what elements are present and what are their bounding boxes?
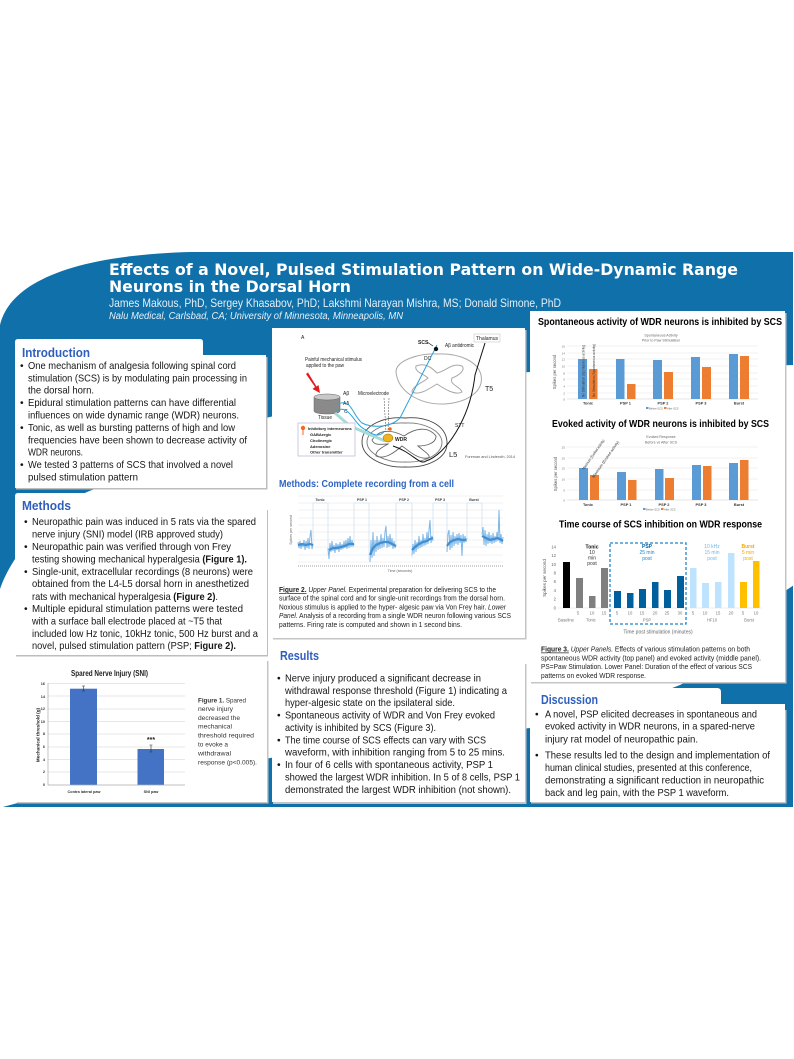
legend: inhibitory interneurons: Adenosine [310,444,331,449]
diagram: experimental preparation: DC [424,356,432,362]
bar chart: time course: 10 [754,610,759,616]
bar chart: evoked activity: Before vs After SCS [645,440,678,444]
bar chart: evoked activity: 15 [562,466,565,470]
annotation: burst: 5 min [742,550,754,556]
bar chart: evoked activity: 20 [562,456,565,460]
line chart: firing rate recording: Tonic [315,498,325,502]
figure 1 caption: threshold required [198,732,254,740]
bar chart: time course: 0 [554,606,557,610]
bar chart: spontaneous activity: Before SCS [649,406,663,410]
bar chart: time course: PSP [643,618,651,622]
text block: methods bullets: testing showing mechanical hyperalgesia (Figure 1). [32,554,247,566]
figure 1 caption: withdrawal [197,750,232,758]
panel: results [272,640,526,804]
heading: results: Results [280,648,319,663]
label: thalamus [474,334,500,342]
text block: results bullets: demonstrated the largest WDR inhibition (not shown). [285,785,511,796]
diagram: experimental preparation: Aδ [343,401,349,407]
text block: introduction bullets: • [20,398,24,409]
annotation: tonic [586,544,599,567]
bar chart: evoked activity [553,435,758,511]
label: thalamus: Thalamus [476,336,499,342]
bar chart: spared nerve injury: Mechanical threshold (g) [36,707,40,762]
affiliations: Nalu Medical, Carlsbad, CA; University of Minnesota, Minneapolis, MN [109,311,404,322]
annotation: PSP: PSP [642,544,653,550]
bar chart: time course: 15 [716,610,721,616]
figure 3 caption: PS=Paw Stimulation. Lower Panel: Duration of the effect of various SCS [541,663,752,671]
figure 2 caption: patterns. Firing rate is computed and shown in 1 second bins. [279,621,462,629]
text block: methods bullets: with a surface ball electrode placed at ~T5 that [31,616,222,628]
bar chart: evoked activity: After SCS [664,507,676,511]
figure 3 caption: patterns on evoked WDR response. [541,672,646,680]
text block: introduction bullets: • [20,423,24,434]
text block: methods bullets: obtained from the L4-L5 dorsal horn in anesthetized [32,579,249,590]
bar chart: time course: 25 [665,610,670,616]
title: Effects of a Novel, Pulsed Stimulation Pattern on Wide-Dynamic Range [109,260,738,279]
text block: introduction bullets: Tonic, as well as bursting patterns of high and low [28,423,236,434]
annotation: tonic: post [587,561,597,567]
annotation: burst: Burst [741,544,755,550]
bar chart: evoked activity: Before SCS [646,507,660,511]
text block: discussion bullets: injury rat model of neuropathic pain. [545,734,698,745]
diagram: experimental preparation: L5 [449,450,457,459]
panel: figure 3 [530,311,786,684]
poster background band [0,252,794,808]
bar chart: evoked activity: Spikes per second [553,456,558,491]
line chart: firing rate recording [289,496,503,573]
diagram: experimental preparation: T5 [485,386,493,393]
bar chart: spontaneous activity: 2 [563,392,565,396]
heading: introduction: Introduction [22,345,90,360]
figure 2 caption: Panel. Analysis of a recording from a single WDR neuron following various SCS [279,612,511,620]
text block: methods bullets: Single-unit, extracellular recordings (8 neurons) were [32,567,253,578]
bar chart: time course: 12 [551,553,557,558]
bar chart: time course: 8 [554,570,557,576]
bar chart: spontaneous activity: Spontaneous Activity [644,334,678,338]
annotation: tonic: Tonic [586,544,599,550]
annotation: PSP: post [642,556,652,562]
bar chart: time course: Tonic [586,618,596,622]
figure 1 caption: decreased the [198,715,240,722]
bar chart: spared nerve injury: Spared Nerve Injury (SNI) [71,669,148,678]
text block: results bullets: Nerve injury produced a significant decrease in [285,673,481,684]
bar chart: evoked activity: 25 [562,446,565,450]
line chart: firing rate recording: PSP 1 [357,498,367,502]
bar chart: spontaneous activity: PSP 1 [620,400,632,406]
bar chart: evoked activity: PSP 2 [659,502,670,507]
bar chart: spontaneous activity: No Stimulation (Spontaneous activity) [582,344,586,397]
text block: discussion bullets: human clinical studies, presented at this conference, [545,763,752,774]
figure 2 caption: Figure 2. Upper Panel. Experimental preparation for delivering SCS to the [279,586,496,594]
figure 1 caption: Figure 1. Spared [198,698,246,704]
text block: introduction bullets: WDR neurons. [28,448,83,459]
bar chart: evoked activity: Maximum (Evoked activity) [582,438,606,471]
bar chart: spontaneous activity: 12 [562,358,565,362]
bar chart: spontaneous activity: PSP 2 [658,400,669,406]
bar chart: spontaneous activity: After SCS [667,406,679,410]
bar chart: evoked activity: Tonic [583,502,594,507]
figure 1 caption [197,698,257,766]
bar chart: spared nerve injury: 6 [43,745,45,749]
text block: methods bullets: Neuropathic pain was induced in 5 rats via the spared [32,517,256,528]
text block: results bullets: showed the largest WDR inhibition. In 5 of 8 cells, PSP 1 [285,772,520,783]
bar chart: evoked activity: 0 [563,498,565,502]
bar chart: evoked activity: 10 [562,478,565,482]
WDR neuron [383,434,393,442]
bar chart: spontaneous activity: 0 [563,398,565,402]
diagram: experimental preparation [298,334,515,467]
legend: inhibitory interneurons: Other transmitter [310,450,343,454]
line chart: firing rate recording: PSP 3 [435,498,445,502]
bar chart: time course: 5 [577,610,580,616]
bar chart: spontaneous activity: Tonic [583,400,594,406]
spinal cord section T5 [396,354,481,404]
annotation: tonic: 10 [589,550,595,556]
diagram: experimental preparation: C [344,409,348,415]
text block: introduction bullets: • [20,460,24,471]
figure 3 caption [541,646,761,680]
text block: results bullets: • [277,673,281,684]
bar chart: spontaneous activity: 14 [562,352,565,356]
bar chart: time course: 15 [602,610,607,616]
figure 1 caption: response (p<0.005). [198,760,257,766]
diagram: experimental preparation: Microelectrode [358,391,389,397]
bar chart: time course: 10 [590,610,595,616]
bar chart: spontaneous activity: Spikes per second [552,354,557,389]
bar chart: time course: 20 [653,610,658,616]
bar chart: time course: Baseline [558,618,575,622]
text block: results bullets: In four of 6 cells with spontaneous activity, PSP 1 [285,760,493,771]
text block: discussion bullets: • [535,709,539,720]
bar chart: time course: 15 [640,610,645,616]
bar chart: evoked activity: 5 [563,488,565,492]
bar chart: spared nerve injury [36,669,185,794]
panel: discussion [530,688,786,804]
text block: methods bullets: • [24,517,28,528]
text block: discussion bullets: evoked activity in WDR neurons, in a spared-nerve [545,722,755,733]
panel: figure 1 [15,660,268,804]
bar chart: time course: 14 [551,544,557,550]
bar chart: evoked activity: Evoked Response [646,435,676,439]
panel: methods [15,493,268,656]
diagram: experimental preparation: STT [455,423,464,429]
text block: results bullets: • [277,711,281,722]
diagram: experimental preparation: Aβ antidromic [445,343,474,349]
heading: methods: Methods [22,498,71,513]
spinal cord section L5 [362,418,447,467]
bar chart: spared nerve injury: 10 [41,720,45,724]
text block: discussion bullets [535,709,770,799]
diagram: experimental preparation: WDR [395,437,407,443]
bar chart: time course: 20 [729,610,734,616]
legend: inhibitory interneurons: Cholinergic [310,438,333,443]
panel: introduction [15,339,268,490]
figure 3 caption: spontaneous WDR activity (top panel) and evoked activity (middle panel). [541,654,761,662]
bar chart: time course: 2 [554,596,557,602]
annotation: 10 kHz [704,544,720,562]
diagram: experimental preparation: Aβ [343,391,349,397]
bar chart: time course: Spikes per second [542,559,547,597]
bar chart: spared nerve injury: 12 [41,707,45,711]
bar chart: time course: 5 [616,610,619,616]
text block: methods bullets: • [24,604,28,615]
text block: introduction bullets: • [20,361,24,372]
text block: discussion bullets: A novel, PSP elicited decreases in spontaneous and [545,709,757,720]
bar chart: time course [542,543,762,636]
bar chart: time course: 6 [554,579,557,584]
text block: discussion bullets: These results led to the design and implementation of [545,751,770,762]
text block: results bullets: Spontaneous activity of WDR and Von Frey evoked [285,711,495,722]
annotation: 10 kHz: 15 min [704,550,720,556]
text block: methods bullets: • [24,542,28,553]
figure 3 caption: Figure 3. Upper Panels. Effects of various stimulation patterns on both [541,646,750,654]
bar chart: spontaneous activity: 8 [563,372,565,376]
diagram: experimental preparation: Foreman and Linderoth, 2014 [465,455,515,459]
text block: introduction bullets: the dorsal horn. [28,386,94,397]
bar chart: spared nerve injury: 2 [43,770,45,774]
text block: introduction bullets [20,361,247,483]
legend: inhibitory interneurons: Inhibitory interneurons [308,426,353,431]
bar chart: spared nerve injury: 4 [43,758,46,762]
bar chart: time course: 10 [703,610,708,616]
text block: introduction bullets: stimulation (SCS) is by modulating pain processing in [28,374,247,384]
figure 1 caption: to evoke a [198,742,228,748]
icon: red stimulus arrow [306,372,320,393]
bar chart: time course: 30 [678,610,683,616]
diagram: experimental preparation: A [301,335,305,341]
text block: methods bullets: novel, pulsed stimulation pattern (PSP; Figure 2). [32,641,236,652]
bar chart: spared nerve injury: 14 [41,695,46,699]
figure 1 caption: mechanical [198,724,232,730]
text block: results bullets: withdrawal response threshold (Figure 1) indicating a [284,686,507,697]
bar chart: spared nerve injury: 16 [41,682,45,686]
text block: methods bullets [24,517,258,652]
bar chart: time course: Time post stimulation (minutes) [623,630,693,636]
heading: complete recording: Methods: Complete recording from a cell [279,479,454,490]
bar chart: spontaneous activity [552,334,758,410]
annotation: PSP: 25 min [639,550,655,556]
line chart: firing rate recording: PSP 2 [399,498,409,502]
text block: results bullets: waveform, with inhibition ranging from 5 to 25 mins. [284,748,505,759]
figure 2 caption: Noxious stimulus is applied to the hyper- algesic paw via Von Frey hair. Lower [279,604,507,612]
bar chart: spared nerve injury: *** [147,737,155,744]
text block: results bullets: • [277,735,281,746]
annotation: PSP [639,544,655,562]
text block: discussion bullets: back and leg pain, with the PSP 1 waveform. [545,788,729,799]
bar chart: spontaneous activity: 10 [562,364,565,368]
bar chart: spontaneous activity: 16 [562,344,565,348]
diagram: experimental preparation: applied to the paw [306,363,344,369]
title: Neurons in the Dorsal Horn [109,277,351,296]
annotation: tonic: min [588,556,596,562]
bar chart: evoked activity: PSP 3 [696,502,707,507]
annotation: burst [741,544,755,562]
bar chart: spontaneous activity: No Stimulation (Spontaneous activity) [592,343,596,397]
neural pathways [335,343,485,462]
bar chart: time course: 10 [628,610,633,616]
text block: methods bullets: • [24,567,28,578]
legend: inhibitory interneurons: GABAergic [310,432,332,437]
text block: results bullets: • [277,760,281,771]
bar chart: spared nerve injury: 8 [43,732,45,736]
text block: introduction bullets: pulsed stimulation pattern [28,472,138,483]
title [109,260,738,296]
bar chart: spontaneous activity: Prior to Paw Stimulation [642,338,680,342]
text block: introduction bullets: frequencies have been shown to decrease activity of [28,435,247,446]
text block: results bullets: The time course of SCS effects can vary with SCS [285,735,486,746]
bar chart: spared nerve injury: SNI paw [144,790,158,794]
line chart: firing rate recording: Burst [469,498,479,502]
bar chart: spontaneous activity: PSP 3 [696,400,707,406]
bar chart: time course: 4 [554,588,557,593]
text block: results bullets: hyper-algesic state on the ipsilateral side. [285,698,455,709]
text block: methods bullets: Neuropathic pain was verified through von Frey [32,542,232,553]
panel: figure 2 [272,328,526,640]
text block: introduction bullets: influences on wide dynamic range (WDR) neurons. [28,410,239,422]
line chart: firing rate recording: Spikes per second [289,515,293,545]
text block: methods bullets: Multiple epidural stimulation patterns were tested [32,604,243,615]
annotation: burst: post [743,556,753,562]
authors: James Makous, PhD, Sergey Khasabov, PhD; Lakshmi Narayan Mishra, MS; Donald Simone, PhD [109,296,561,310]
diagram: experimental preparation: SCS [418,340,429,346]
bar chart: time course: 5 [692,610,695,616]
annotation: 10 kHz: 10 kHz [704,544,720,550]
text block: introduction bullets: We tested 3 patterns of SCS that involved a novel [28,460,233,471]
text block: introduction bullets: One mechanism of analgesia following spinal cord [28,361,236,372]
diagram: experimental preparation: Painful mechanical stimulus [305,357,362,363]
bar chart: spontaneous activity: Burst [734,400,745,406]
text block: discussion bullets: • [535,751,539,762]
line chart: firing rate recording: Time (seconds) [388,569,412,573]
annotation: 10 kHz: post [707,556,717,562]
heading: discussion: Discussion [541,692,598,707]
figure 2 caption [279,586,511,629]
bar chart: time course: 5 [742,610,745,616]
heading: time course: Time course of SCS inhibition on WDR response [559,520,762,530]
icon: tissue cylinder [314,394,340,414]
bar chart: spared nerve injury: 0 [43,783,45,787]
text block: introduction bullets: Epidural stimulation patterns can have differential [28,398,236,409]
figure 1 caption: nerve injury [198,706,234,713]
text block: methods bullets: nerve injury (SNI) model (IRB approved study) [32,530,223,540]
diagram: experimental preparation: Tissue [318,415,332,421]
bar chart: spared nerve injury: Contra lateral paw [68,790,101,794]
bar chart: spontaneous activity: 4 [563,384,565,388]
text block: methods bullets: included low Hz tonic, 10kHz tonic, 500 Hz burst and a [32,629,258,640]
bar chart: evoked activity: Maximum (Evoked activity) [592,440,620,479]
bar chart: time course: 10 [551,562,557,567]
bar chart: time course: HF10 [707,618,718,622]
bar chart: time course: Burst [744,618,755,622]
bar chart: spontaneous activity: 6 [563,378,565,382]
text block: discussion bullets: demonstrating a significant reduction in neuropathic [545,775,764,786]
bar chart: evoked activity: PSP 1 [621,502,632,507]
text block: results bullets: activity is inhibited by SCS (Figure 3). [285,723,436,734]
bar chart: evoked activity: Burst [734,502,745,507]
legend: inhibitory interneurons [298,423,355,456]
figure 2 caption: surface of the spinal cord and for single-unit recordings from the dorsal horn. [279,594,505,602]
text block: results bullets [277,673,520,796]
text block: methods bullets: rats with mechanical hyperalgesia (Figure 2). [32,592,218,603]
